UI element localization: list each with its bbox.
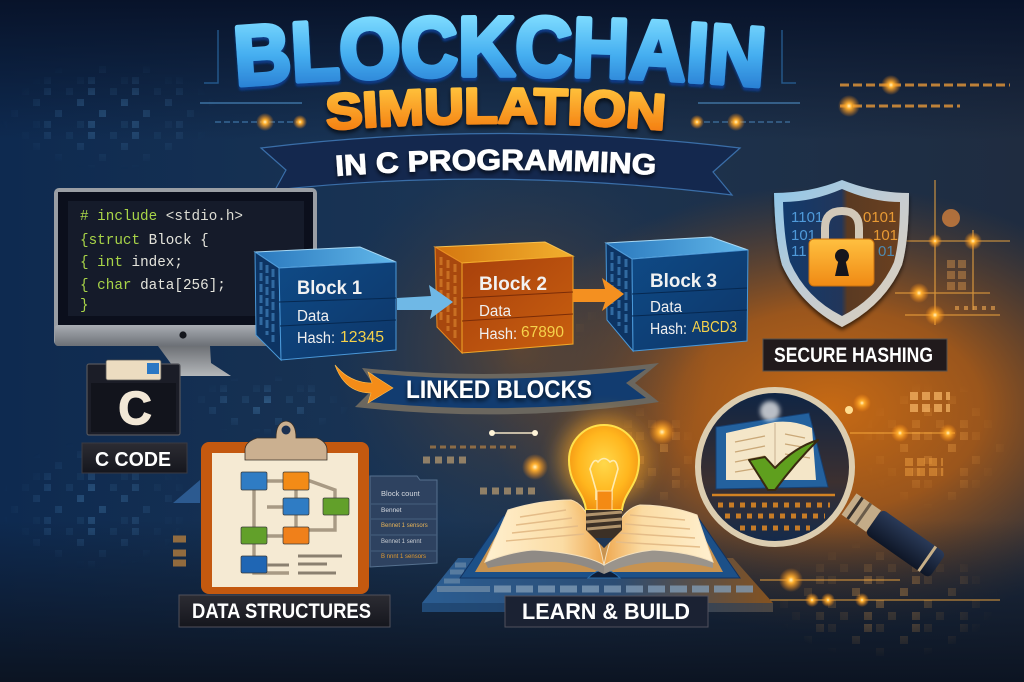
- label: C code: [82, 443, 187, 473]
- handle: [840, 492, 946, 578]
- block 2: [435, 242, 573, 353]
- subtitle text: IN C PROGRAMMING: [334, 149, 656, 181]
- label: Data Structures: [179, 595, 390, 627]
- label: Learn & Build: [505, 596, 708, 627]
- block 1 text: Data: [297, 308, 329, 325]
- label: Learn & Build: LEARN & BUILD: [522, 599, 690, 624]
- block 3 text: [650, 271, 737, 338]
- ribbon: In C Programming: [260, 132, 742, 196]
- binary digits: 0101: [863, 209, 896, 226]
- clipboard: data structures: [173, 421, 369, 594]
- side panel: block list: Bennet: [381, 507, 402, 514]
- binary digits: 11: [791, 243, 807, 260]
- code text: [80, 209, 243, 314]
- icon: curved orange arrow: [335, 365, 393, 403]
- code text: { char data[256];: [80, 278, 226, 294]
- icon: C file: C: [118, 382, 152, 434]
- binary digits: 1101: [791, 209, 823, 226]
- code text: {struct Block {: [80, 233, 209, 249]
- side panel: block list: [370, 476, 437, 567]
- code text: { int index;: [80, 255, 183, 271]
- clip: [245, 421, 327, 460]
- binary digits: 101: [873, 227, 898, 244]
- flowchart nodes: [241, 472, 349, 573]
- block 2 text: Hash:: [479, 326, 517, 343]
- block 3 text: ABCD3: [692, 319, 737, 336]
- block 1 text: Hash:: [297, 330, 335, 347]
- open book pages: [485, 500, 713, 574]
- block 3: [606, 237, 748, 351]
- label: Secure Hashing: [763, 339, 947, 371]
- shield with padlock: [774, 180, 909, 327]
- block 2 text: 67890: [521, 324, 564, 341]
- ribbon text: LINKED BLOCKS: [406, 376, 592, 404]
- binary digits: [791, 209, 898, 260]
- icon: C file: [87, 360, 180, 435]
- block 2 text: Data: [479, 303, 511, 320]
- side panel: block list: Block count: [381, 489, 421, 498]
- block 1 text: [297, 278, 384, 347]
- arrow: block 1 to 2: [397, 285, 453, 319]
- padlock: [809, 211, 874, 286]
- block 1 text: Block 1: [297, 278, 362, 299]
- block 2 text: [479, 274, 564, 343]
- magnifying glass: [698, 390, 946, 578]
- binary digits: 101: [791, 227, 816, 244]
- block 3 text: Hash:: [650, 321, 687, 338]
- arrow: block 2 to 3: [573, 278, 624, 311]
- side panel: block list: B nnnt 1 sensors: [381, 554, 426, 560]
- block 3 text: Block 3: [650, 271, 717, 292]
- book with light bulb: [460, 416, 740, 578]
- block 1: [255, 247, 396, 360]
- block 3 text: Data: [650, 299, 682, 316]
- light bulb: [560, 416, 648, 548]
- title: Simulation: SIMULATION: [325, 87, 666, 136]
- block 1 text: 12345: [340, 329, 384, 346]
- side panel: block list: Bennet 1 sennt: [381, 539, 422, 545]
- side panel: block list: Bennet 1 sensors: [381, 523, 428, 529]
- block 2 text: Block 2: [479, 274, 547, 295]
- label: C code: C CODE: [95, 449, 171, 471]
- code text: }: [80, 298, 89, 314]
- label: Data Structures: DATA STRUCTURES: [192, 600, 371, 623]
- ribbon: Linked Blocks: [335, 363, 659, 414]
- title: Blockchain: BLOCKCHAIN: [234, 14, 766, 92]
- binary digits: 01: [878, 243, 895, 260]
- code text: # include <stdio.h>: [80, 209, 243, 225]
- keyboard: [422, 558, 773, 612]
- label: Secure Hashing: SECURE HASHING: [774, 344, 933, 367]
- monitor with code: [54, 188, 317, 376]
